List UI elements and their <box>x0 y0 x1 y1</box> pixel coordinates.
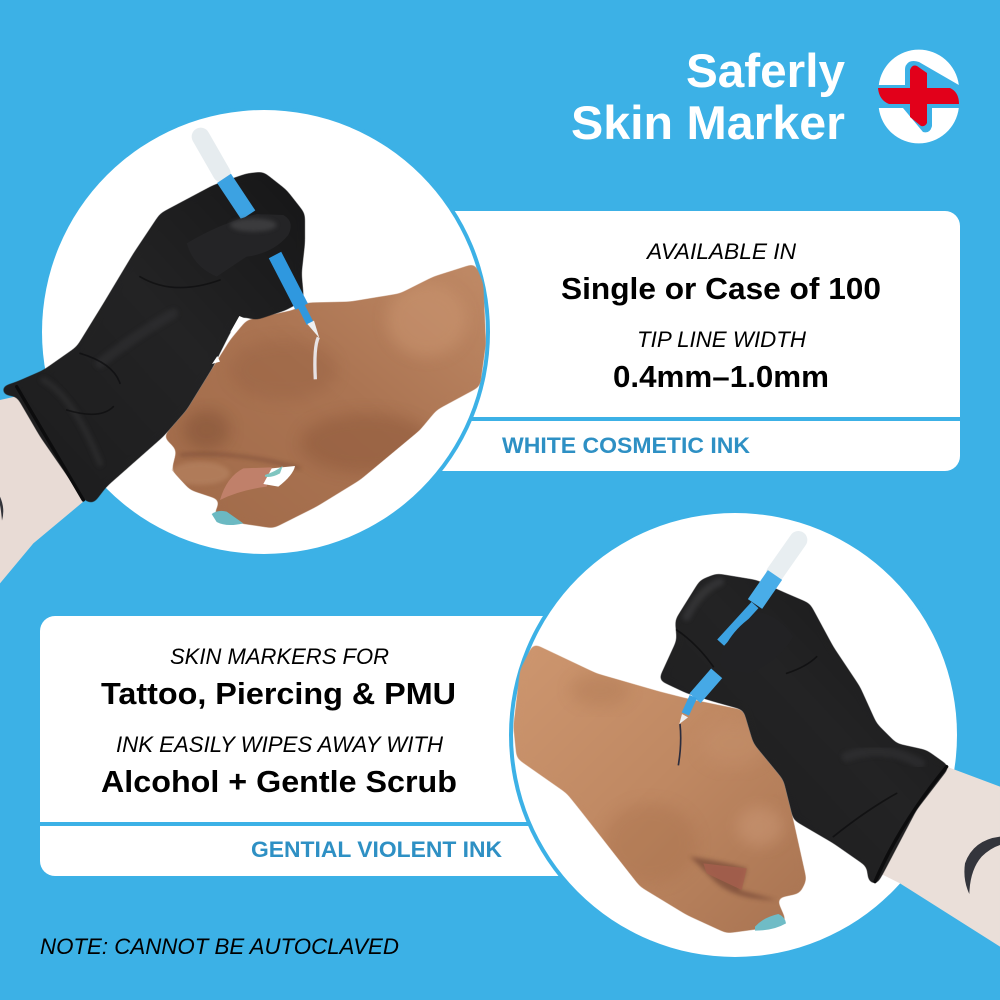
text: single or case: Single or Case of 100 <box>561 271 881 306</box>
photo circle: white ink marker on hand <box>0 106 490 583</box>
pen <box>679 540 798 724</box>
text: line width value: 0.4mm–1.0mm <box>613 359 829 394</box>
gaps between glove and hand <box>212 316 247 364</box>
panel: bottom product card <box>40 616 600 876</box>
text: skin markers for: SKIN MARKERS FOR <box>170 644 389 669</box>
thumb over pen <box>187 214 291 277</box>
glove highlights <box>677 582 947 882</box>
brown hand <box>163 263 486 528</box>
text: violet ink label: GENTIAL VIOLENT INK <box>251 837 502 862</box>
white ink line <box>315 337 318 379</box>
black glove <box>658 573 950 885</box>
icon: cross logo <box>878 50 959 143</box>
title: Saferly <box>686 44 845 97</box>
note text: NOTE: CANNOT BE AUTOCLAVED <box>40 934 399 959</box>
text: white ink label: WHITE COSMETIC INK <box>502 433 750 458</box>
thumb over pen <box>720 612 793 673</box>
nails <box>212 511 243 525</box>
tattoo <box>0 497 3 521</box>
panel: top product card <box>400 211 960 471</box>
pen <box>201 137 319 338</box>
brown hand <box>513 643 807 933</box>
black glove <box>2 172 305 504</box>
gap between fingers <box>263 466 295 487</box>
pale forearm <box>0 397 83 583</box>
ink line <box>678 724 681 765</box>
text: tip line width: TIP LINE WIDTH <box>637 327 806 352</box>
text: available in: AVAILABLE IN <box>645 239 796 264</box>
tattoo <box>964 837 1000 894</box>
pale forearm <box>880 767 1000 947</box>
nail <box>755 914 786 931</box>
inner finger <box>220 467 272 500</box>
title <box>571 44 845 149</box>
title: Skin Marker <box>571 96 845 149</box>
text: tattoo piercing pmu: Tattoo, Piercing & PMU <box>101 676 456 711</box>
text: alcohol scrub: Alcohol + Gentle Scrub <box>101 764 457 799</box>
glove highlights <box>17 277 220 500</box>
photo circle: gentian violet marker on hand <box>509 509 1000 961</box>
text: wipes away: INK EASILY WIPES AWAY WITH <box>116 732 443 757</box>
